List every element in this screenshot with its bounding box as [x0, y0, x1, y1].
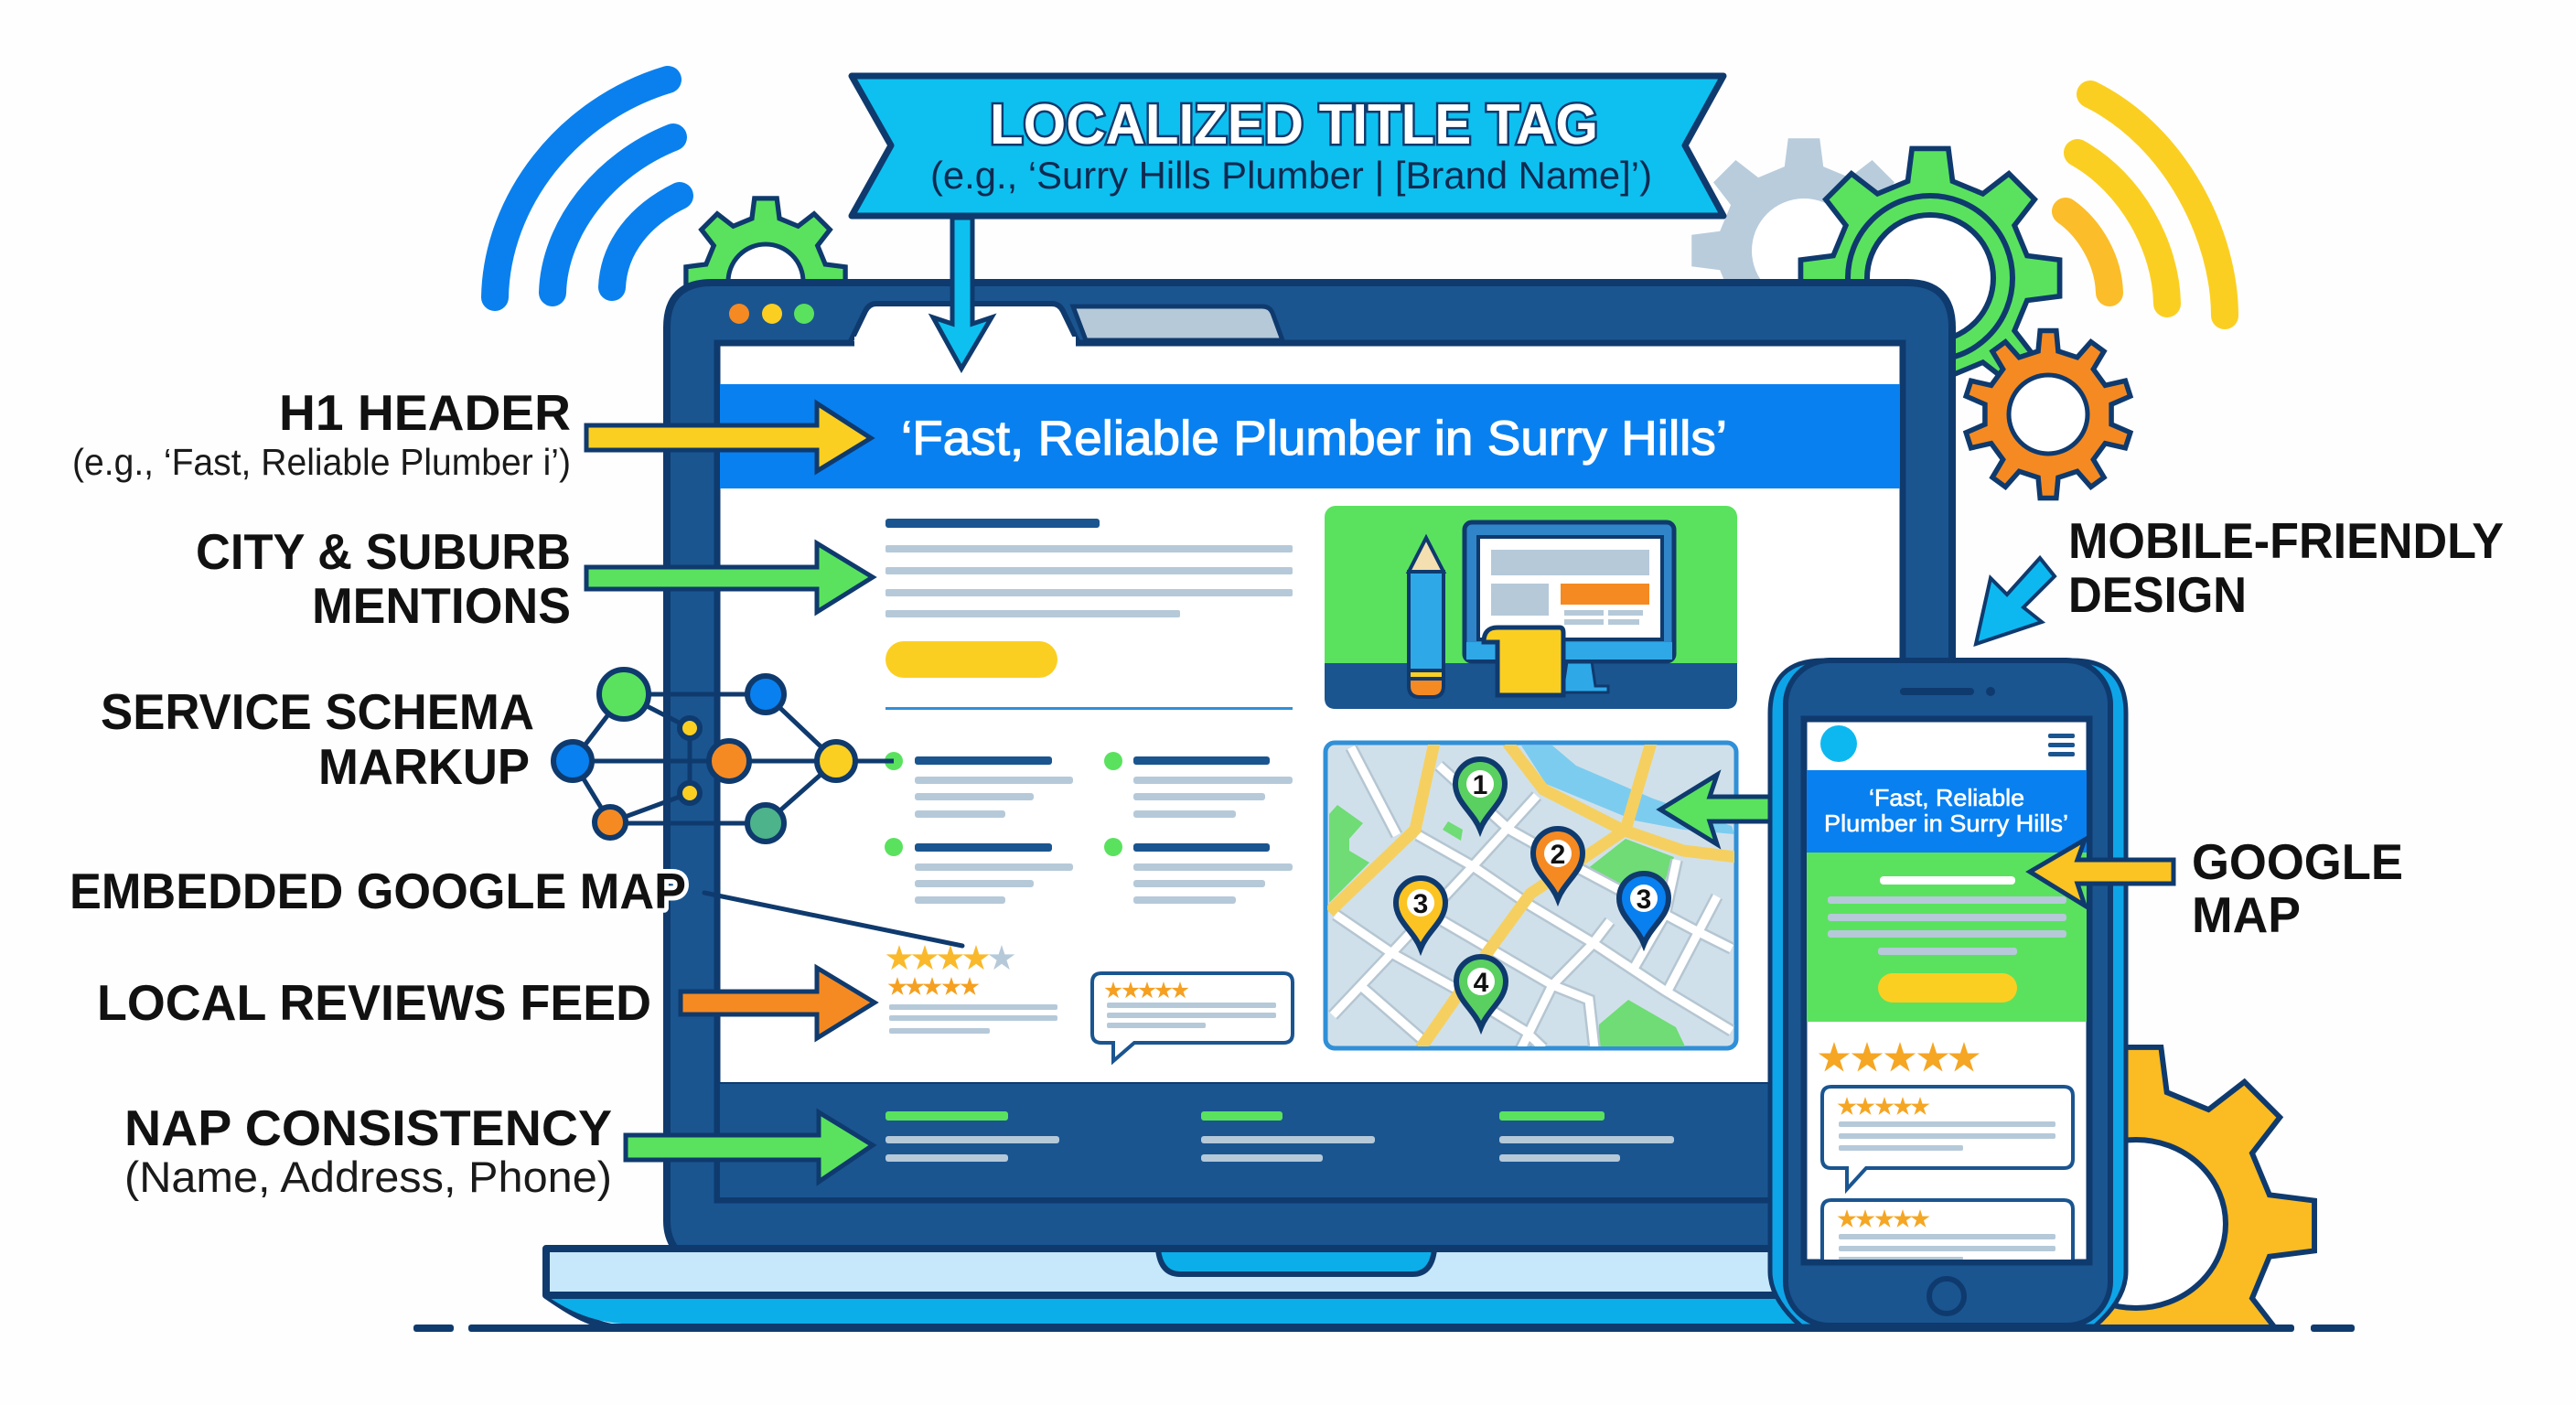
laptop body [667, 283, 1952, 1249]
label: city and suburb mentions: CITY & SUBURB [196, 523, 571, 580]
label: service schema markup [101, 683, 534, 795]
icon: small green gear on laptop [686, 198, 845, 358]
title banner: LOCALIZED TITLE TAG [990, 93, 1598, 156]
phone [1770, 660, 2126, 1326]
map pin 2 [1533, 829, 1583, 899]
label: h1 header: H1 HEADER [279, 384, 571, 441]
map pin 4: 4 [1474, 968, 1489, 998]
embedded map [1326, 743, 1736, 1048]
service feature list [885, 752, 1293, 904]
pencil [1409, 538, 1444, 697]
arrow: map from phone [1660, 775, 1770, 844]
icon: large green gear [1800, 148, 2060, 408]
map pin 3 yellow [1396, 878, 1445, 949]
map pin 3 blue [1619, 874, 1669, 944]
icon: yellow wifi arcs [2066, 94, 2225, 316]
phone rating stars [1819, 1042, 1980, 1072]
reviews feed [886, 945, 1057, 1034]
label: city and suburb mentions [196, 523, 571, 634]
label: mobile-friendly design [2068, 512, 2504, 623]
arrow: city and suburb [586, 543, 873, 612]
label: embedded google map: EMBEDDED GOOGLE MAP [70, 863, 686, 919]
phone h1 band: ‘Fast, Reliable [1869, 784, 2024, 811]
label: mobile-friendly design: MOBILE-FRIENDLY [2068, 512, 2504, 569]
browser active tab [851, 304, 1078, 348]
screen [717, 343, 1903, 1200]
icon: yellow gear behind phone [2100, 1045, 2317, 1325]
arrow: google map on phone [2030, 840, 2174, 906]
label: google map: GOOGLE [2192, 833, 2403, 890]
map pin 4 [1456, 957, 1506, 1027]
label: nap consistency [124, 1099, 612, 1201]
label: mobile-friendly design: DESIGN [2068, 566, 2247, 623]
label: service schema markup: MARKUP [318, 738, 530, 795]
phone review card 1 [1822, 1087, 2073, 1189]
ground line [413, 1325, 2355, 1332]
title banner [852, 76, 1723, 216]
label: service schema markup: SERVICE SCHEMA [101, 683, 534, 740]
phone speaker [1900, 687, 1995, 696]
map pin 3 yellow: 3 [1413, 889, 1428, 919]
phone hero section [1807, 853, 2087, 1022]
phone menu icon [2048, 734, 2075, 756]
label: nap consistency: (Name, Address, Phone) [124, 1153, 612, 1201]
icon: blue wifi arcs [495, 80, 680, 297]
label: h1 header: (e.g., ‘Fast, Reliable Plumber i’) [72, 441, 571, 483]
label: google map: MAP [2192, 886, 2301, 943]
phone screen [1804, 719, 2089, 1262]
phone home button [1929, 1279, 1964, 1314]
label: google map [2192, 833, 2403, 943]
h1 header bar: ‘Fast, Reliable Plumber in Surry Hills’ [901, 412, 1727, 466]
h1 header bar [720, 384, 1900, 488]
arrow: mobile friendly [1976, 558, 2055, 644]
label: h1 header [72, 384, 571, 483]
laptop base [546, 1249, 1921, 1327]
phone h1 band: Plumber in Surry Hills’ [1824, 810, 2068, 837]
arrow: title tag to browser tab [933, 218, 992, 369]
monitor illustration [1465, 522, 1674, 692]
label: nap consistency: NAP CONSISTENCY [124, 1099, 612, 1156]
map pin 1 [1455, 759, 1505, 830]
icon: grey background gear [1691, 138, 1916, 363]
browser inactive tab [1073, 306, 1283, 340]
arrow: h1 header [586, 403, 871, 471]
intro text block [886, 519, 1293, 710]
arrow: nap consistency [626, 1112, 873, 1182]
leader line: embedded google map [704, 893, 962, 946]
map pin 2: 2 [1551, 840, 1565, 870]
review speech bubble [1092, 973, 1293, 1061]
label: city and suburb mentions: MENTIONS [312, 577, 571, 634]
map pin 1: 1 [1473, 770, 1487, 800]
phone review card 2 [1822, 1200, 2073, 1260]
hero image panel [1325, 506, 1737, 709]
icon: orange gear [1966, 330, 2131, 499]
arrow: local reviews [681, 968, 875, 1038]
title banner: (e.g., ‘Surry Hills Plumber | [Brand Name]’) [930, 154, 1652, 197]
map pin 3 blue: 3 [1637, 885, 1651, 915]
phone h1 band [1807, 770, 2087, 853]
browser window dots [729, 304, 814, 324]
footer nap band [717, 1082, 1903, 1197]
label: local reviews feed: LOCAL REVIEWS FEED [97, 974, 651, 1031]
schema network diagram [553, 670, 894, 842]
yellow document [1484, 627, 1563, 695]
phone logo dot [1820, 725, 1857, 762]
